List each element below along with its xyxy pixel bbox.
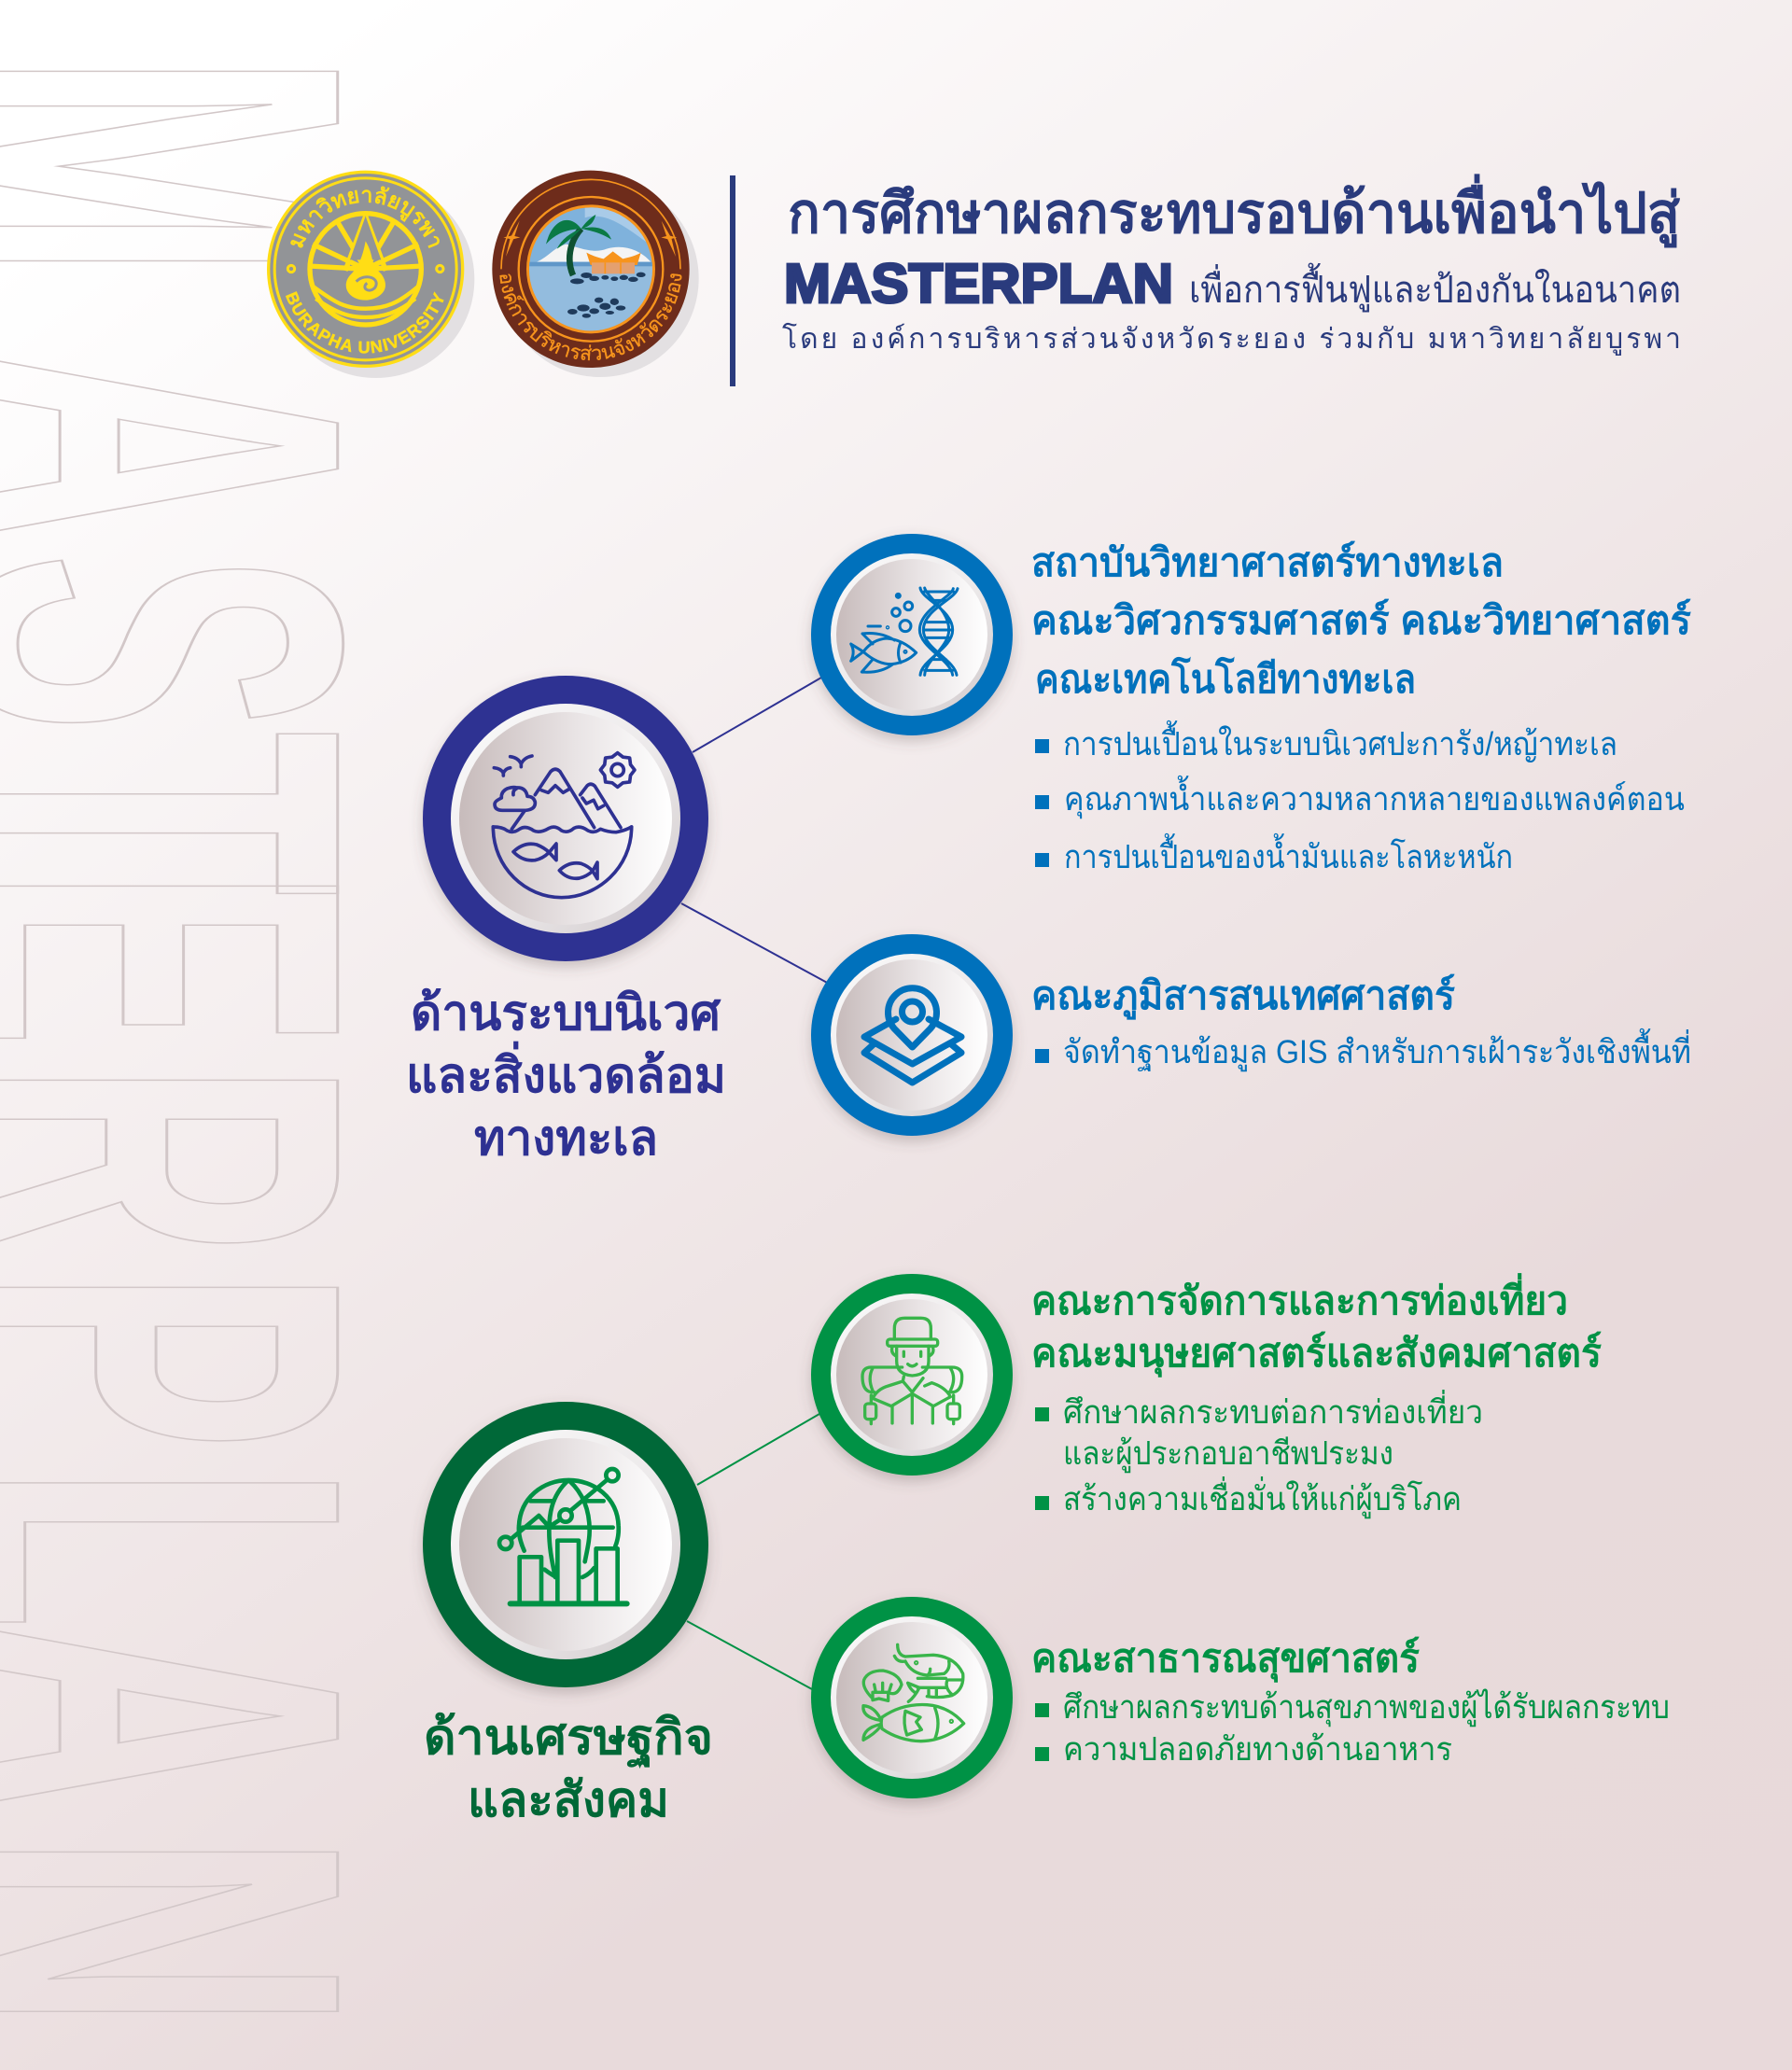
text block: marine science faculties: คุณภาพน้ำและความหลากหลายของแพลงค์ตอน <box>1064 775 1685 818</box>
heading: economy and society: ด้านเศรษฐกิจ <box>424 1711 713 1769</box>
text block: marine science faculties: สถาบันวิทยาศาสตร์ทางทะเล <box>1031 540 1504 584</box>
heading: economy and society: และสังคม <box>468 1773 669 1827</box>
connector lines <box>681 678 831 1689</box>
circle: marine science <box>811 534 1013 735</box>
title line 2: เพื่อการฟื้นฟูและป้องกันในอนาคต <box>1189 262 1681 312</box>
header divider <box>730 175 735 386</box>
circle: economy and society <box>423 1402 708 1687</box>
text block: marine science faculties: การปนเปื้อนของน้ำมันและโลหะหนัก <box>1064 832 1513 875</box>
circle: public health <box>811 1597 1013 1798</box>
text block: public health faculty: คณะสาธารณสุขศาสตร์ <box>1031 1636 1420 1683</box>
logo: Burapha University: มหาวิทยาลัยบูรพา <box>290 187 440 248</box>
text block: public health faculty: ความปลอดภัยทางด้านอาหาร <box>1063 1731 1452 1768</box>
icon: island, fish and sun <box>493 753 635 898</box>
text block: marine science faculties: คณะเทคโนโลยีทางทะเล <box>1035 656 1416 701</box>
text block: tourism and humanities faculties: คณะการจัดการและการท่องเที่ยว <box>1031 1273 1568 1322</box>
heading: marine ecosystem: ด้านระบบนิเวศ <box>411 986 721 1041</box>
text block: geoinformatics faculty: จัดทำฐานข้อมูล GIS สำหรับการเฝ้าระวังเชิงพื้นที่ <box>1063 1028 1691 1071</box>
heading: marine ecosystem: และสิ่งแวดล้อม <box>406 1042 726 1103</box>
text block: geoinformatics faculty: คณะภูมิสารสนเทศศาสตร์ <box>1031 973 1455 1020</box>
text block: marine science faculties <box>1031 540 1691 875</box>
circle: geoinformatics <box>811 934 1013 1136</box>
text block: marine science faculties: การปนเปื้อนในระบบนิเวศปะการัง/หญ้าทะเล <box>1063 720 1617 762</box>
circle: tourism <box>811 1274 1013 1476</box>
logo: Burapha University <box>267 170 474 378</box>
text block: tourism and humanities faculties: ศึกษาผลกระทบต่อการท่องเที่ยว <box>1063 1390 1483 1431</box>
text block: tourism and humanities faculties: และผู้ประกอบอาชีพประมง <box>1063 1435 1393 1473</box>
circle: marine ecosystem <box>423 676 708 961</box>
icon: fish and DNA <box>851 588 958 675</box>
text block: geoinformatics faculty <box>1031 973 1691 1071</box>
logo: Burapha University: BURAPHA UNIVERSITY <box>286 291 444 354</box>
title block <box>782 174 1681 356</box>
heading: marine ecosystem <box>406 986 726 1166</box>
MASTERPLAN heading: MASTERPLAN <box>784 253 1173 315</box>
text block: public health faculty <box>1031 1636 1670 1768</box>
text block: tourism and humanities faculties: สร้างความเชื่อมั่นให้แก่ผู้บริโภค <box>1063 1476 1462 1518</box>
icon: globe and bar chart <box>499 1469 627 1603</box>
icon: map pin on layers <box>864 988 961 1083</box>
text block: public health faculty: ศึกษาผลกระทบด้านสุขภาพของผู้ได้รับผลกระทบ <box>1063 1688 1670 1727</box>
heading: economy and society <box>424 1711 713 1827</box>
logo: Rayong Provincial Administrative Organization <box>492 170 698 377</box>
title line 1: การศึกษาผลกระทบรอบด้านเพื่อนำไปสู่ <box>788 174 1680 248</box>
text block: tourism and humanities faculties: คณะมนุษยศาสตร์และสังคมศาสตร์ <box>1031 1331 1602 1378</box>
icon: seafood <box>863 1644 964 1741</box>
icon: backpacker <box>862 1318 962 1424</box>
text block: marine science faculties: คณะวิศวกรรมศาสตร์ คณะวิทยาศาสตร์ <box>1031 598 1691 642</box>
byline: โดย องค์การบริหารส่วนจังหวัดระยอง ร่วมกับ มหาวิทยาลัยบูรพา <box>782 322 1681 356</box>
heading: marine ecosystem: ทางทะเล <box>474 1112 658 1166</box>
logo: Rayong Provincial Administrative Organization: องค์การบริหารส่วนจังหวัดระยอง <box>499 273 681 360</box>
text block: tourism and humanities faculties <box>1031 1273 1602 1518</box>
